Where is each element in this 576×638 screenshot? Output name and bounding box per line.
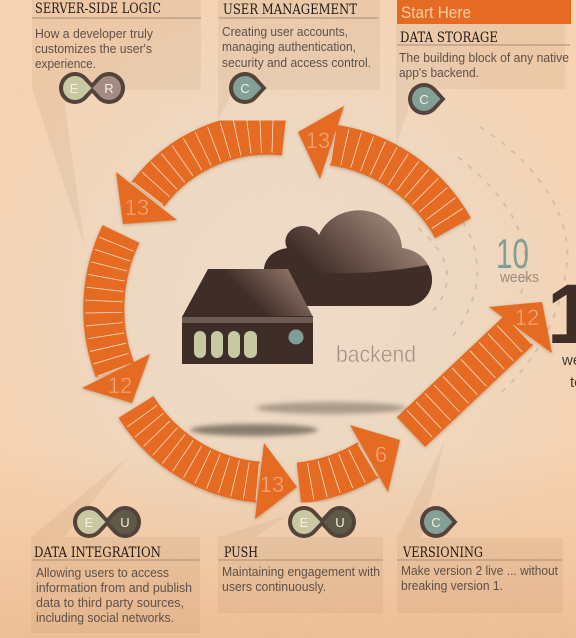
ten weeks label: weeks [499,269,539,286]
arrow: data integration 13: 13 [260,472,284,497]
panel: versioning [397,440,563,613]
icon: C badge: C [240,81,250,96]
icon: E R badge [59,72,125,104]
text block [222,24,371,70]
text block: Creating user accounts, [222,24,348,39]
panel: user management [218,0,380,120]
text block: including social networks. [36,610,174,625]
text block: Make version 2 live ... without [401,563,558,578]
text block: data to third party sources, [36,595,184,610]
heading: DATA STORAGE [400,30,498,46]
arrow: push 6 [299,425,400,492]
heading: USER MANAGEMENT [223,2,358,18]
text block: experience. [35,56,96,71]
panel: data integration [31,458,200,633]
arrow: user management 13 [116,134,284,224]
text block: Allowing users to access [36,565,169,580]
dashed timeline arcs [418,127,567,397]
icon: C badge: C [431,515,441,530]
icon: E R badge: E [70,81,79,96]
icon: E U badge: U [120,515,130,530]
arrow: versioning 12 [411,302,552,432]
panel: data storage [396,0,571,145]
text block: customizes the user's [35,41,152,56]
text block: app's backend. [399,65,479,80]
icon: E R badge: R [104,81,114,96]
text block [222,564,380,594]
text block [399,50,569,80]
arrow: user management 13: 13 [125,195,149,220]
icon: E U badge [73,506,141,538]
ground shadow: cloud [256,402,406,414]
icon: E U badge [288,506,356,538]
icon: C badge [420,506,458,538]
backend label: backend [336,341,416,367]
arrow: data integration 13 [136,407,297,519]
arrow: server-side logic 12: 12 [108,373,132,398]
text block [35,26,153,71]
text block [36,565,192,625]
heading: DATA INTEGRATION [34,545,161,561]
icon: C badge [229,72,266,104]
ten weeks label: 10 [496,230,529,277]
icon: C badge [408,83,446,115]
icon: C badge: C [419,92,429,107]
ground shadow: server [190,424,318,436]
text block: users continuously. [222,579,326,594]
cloud icon [264,210,432,306]
heading: VERSIONING [402,545,483,561]
text block: Maintaining engagement with [222,564,380,579]
arrow: data storage 13: 13 [306,128,330,153]
text block: information from and publish [36,580,192,595]
arrow: data storage 13 [298,106,453,228]
text block: security and access control. [222,55,371,70]
text block: The building block of any native [399,50,569,65]
icon: E U badge: E [300,515,309,530]
text block: breaking version 1. [401,578,503,593]
arrow: server-side logic 12 [82,234,150,403]
heading: PUSH [224,545,258,561]
server icon [182,269,313,364]
icon: E U badge: U [335,515,345,530]
heading: SERVER-SIDE LOGIC [35,1,161,17]
panel: push [218,506,383,613]
start here banner [397,0,571,24]
start here banner: Start Here [401,3,471,22]
text block: managing authentication, [222,39,356,54]
arrow: versioning 12: 12 [515,305,539,330]
text block: How a developer truly [35,26,153,41]
icon: E U badge: E [85,515,94,530]
panel: server-side logic [32,0,201,248]
arrow: push 6: 6 [375,442,387,467]
text block [401,563,558,593]
